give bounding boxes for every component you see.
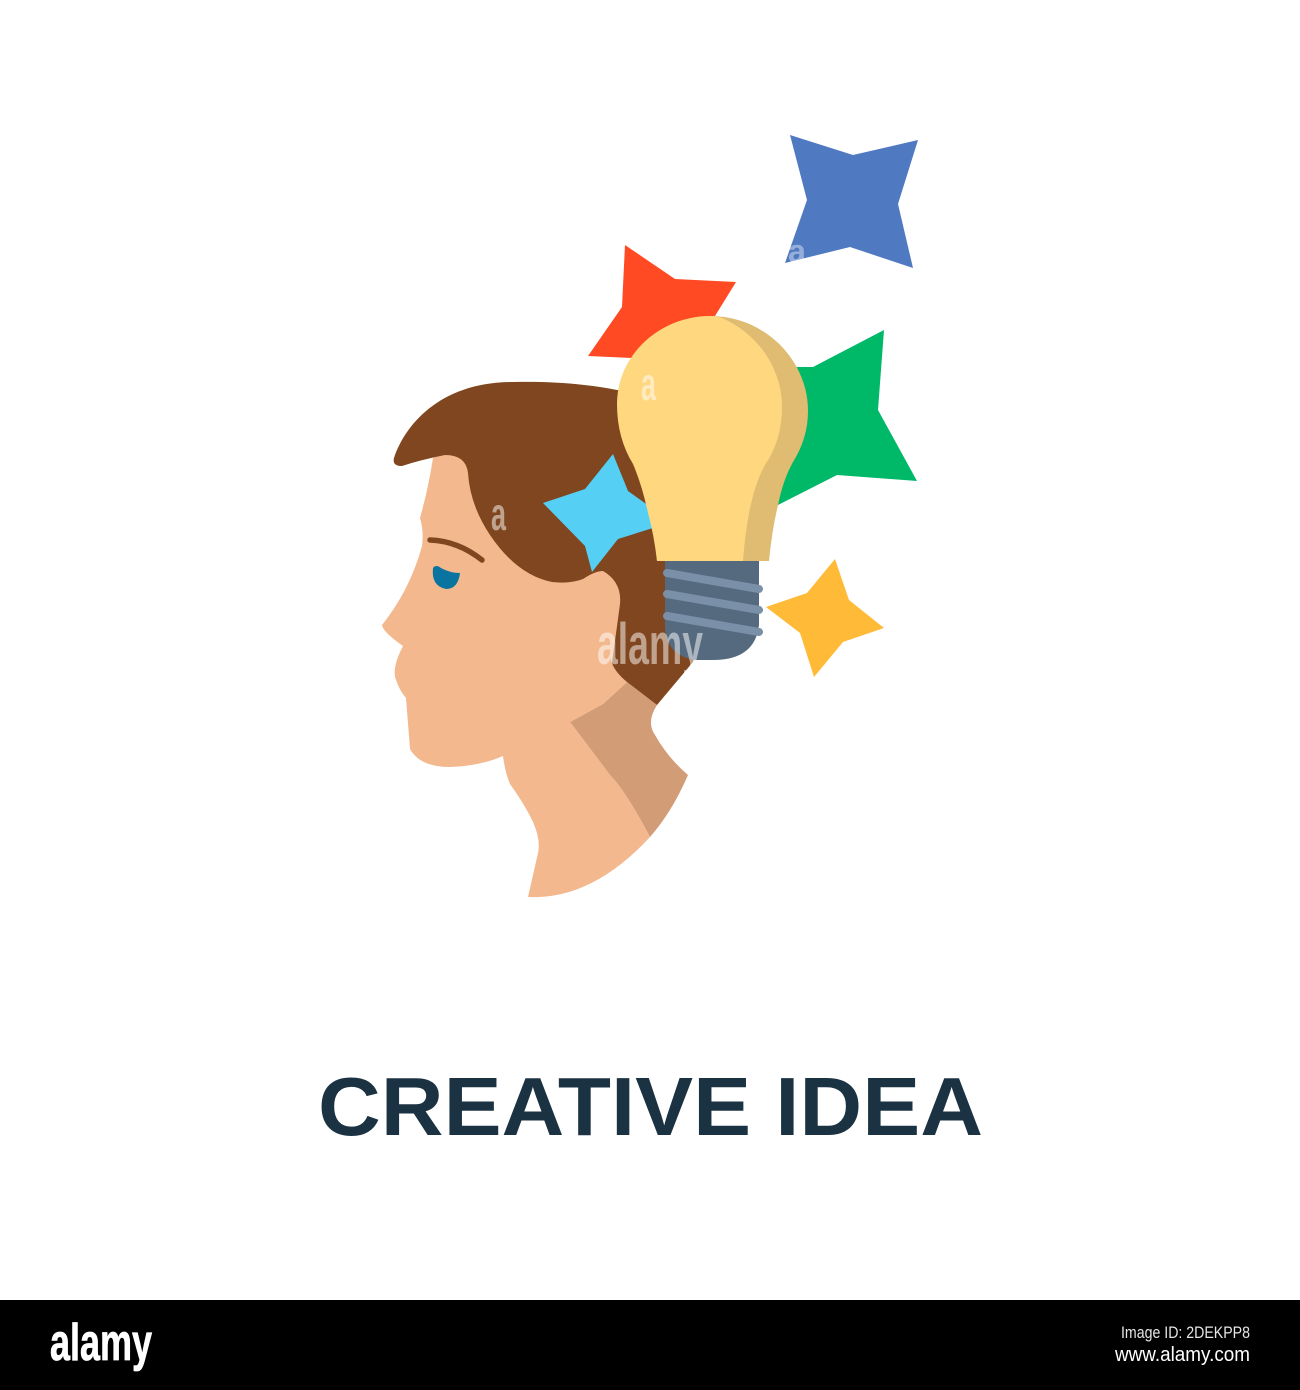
watermark: small a on hair: a xyxy=(491,488,506,540)
title: CREATIVE IDEA xyxy=(318,1060,983,1153)
icon: yellow star xyxy=(766,559,884,677)
icon: blue star xyxy=(785,135,918,268)
eye xyxy=(433,566,460,589)
person head xyxy=(382,382,700,897)
icon: green star xyxy=(770,330,917,505)
footer logo: alamy xyxy=(50,1314,152,1372)
eyebrow xyxy=(430,540,482,560)
icon: cyan star xyxy=(543,454,656,572)
website: www.alamy.com xyxy=(1114,1344,1250,1366)
socket threads xyxy=(667,573,759,632)
image id: Image ID: 2DEKPP8 xyxy=(1121,1323,1250,1342)
watermark: small a on blue star: a xyxy=(788,233,806,269)
bulb shade xyxy=(650,316,808,561)
watermark: small a on bulb: a xyxy=(641,358,656,410)
watermark: alamy: alamy xyxy=(597,612,703,677)
face and neck xyxy=(382,440,650,897)
bulb glass xyxy=(617,316,782,561)
bulb socket xyxy=(665,561,759,660)
icon: light bulb xyxy=(617,316,808,660)
neck shadow xyxy=(570,682,688,837)
footer bar xyxy=(0,1300,1300,1390)
hair xyxy=(394,382,700,705)
icon: red star xyxy=(588,245,736,360)
illustration: creative idea head with bulb and stars xyxy=(382,135,918,897)
